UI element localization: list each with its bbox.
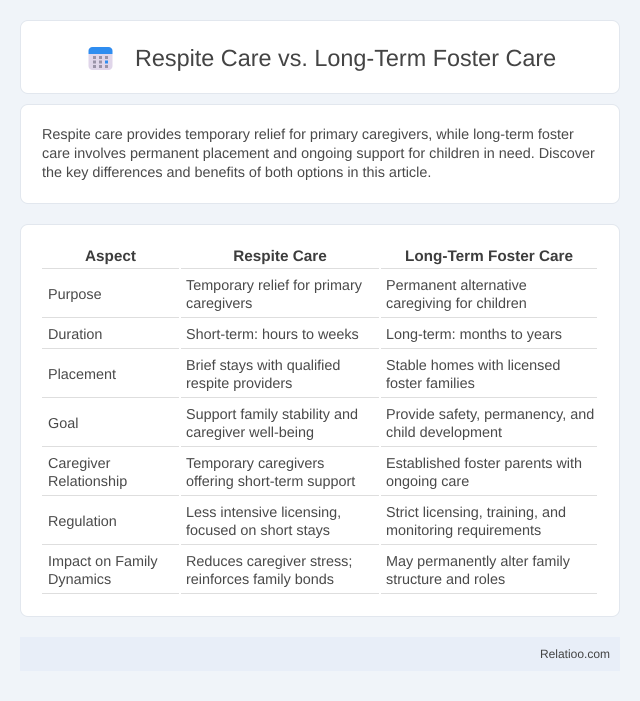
- Goal respite: [186, 407, 358, 441]
- intro text: the key differences and benefits of both options in this article.: [42, 165, 431, 181]
- Regulation respite: focused on short stays: [186, 523, 330, 539]
- Goal foster: child development: [386, 425, 502, 441]
- Purpose foster: caregiving for children: [386, 296, 527, 312]
- Placement foster: foster families: [386, 376, 475, 392]
- Relationship foster: Established foster parents with: [386, 456, 582, 472]
- row: Regulation: Regulation: [48, 514, 117, 530]
- Goal respite: caregiver well-being: [186, 425, 314, 441]
- intro text: Respite care provides temporary relief for primary caregivers, while long-term foster: [42, 127, 574, 143]
- row: Impact on Family Dynamics: Impact on Family: [48, 554, 158, 570]
- Goal foster: [386, 407, 594, 441]
- row: Goal: Goal: [48, 416, 78, 432]
- title card: [20, 20, 620, 94]
- Relationship respite: offering short-term support: [186, 474, 355, 490]
- row: Impact on Family Dynamics: [48, 554, 158, 588]
- row: Placement: Placement: [48, 367, 116, 383]
- Placement respite: respite providers: [186, 376, 292, 392]
- table card: [20, 224, 620, 617]
- Impact foster: May permanently alter family: [386, 554, 570, 570]
- Purpose foster: Permanent alternative: [386, 278, 527, 294]
- intro text: care involves permanent placement and ongoing support for children in need. Discover: [42, 146, 595, 162]
- row: Purpose: Purpose: [48, 287, 102, 303]
- Regulation foster: Strict licensing, training, and: [386, 505, 566, 521]
- title: Respite Care vs. Long-Term Foster Care: [135, 45, 556, 71]
- Goal foster: Provide safety, permanency, and: [386, 407, 594, 423]
- Purpose respite: Temporary relief for primary: [186, 278, 362, 294]
- row: Duration: Duration: [48, 327, 102, 343]
- Impact respite: [186, 554, 352, 588]
- Duration foster: Long-term: months to years: [386, 327, 562, 343]
- Relationship respite: [186, 456, 356, 490]
- Relationship respite: Temporary caregivers: [186, 456, 324, 472]
- Relationship foster: ongoing care: [386, 474, 469, 490]
- Placement foster: Stable homes with licensed: [386, 358, 560, 374]
- Impact foster: structure and roles: [386, 572, 505, 588]
- Purpose foster: [386, 278, 527, 312]
- Goal respite: Support family stability and: [186, 407, 358, 423]
- Regulation respite: [186, 505, 341, 539]
- Placement respite: Brief stays with qualified: [186, 358, 340, 374]
- row: Caregiver Relationship: [48, 456, 127, 490]
- row: Caregiver Relationship: Relationship: [48, 474, 127, 490]
- intro text: [42, 127, 595, 181]
- Relationship foster: [386, 456, 582, 490]
- Placement foster: [386, 358, 560, 392]
- Purpose respite: [186, 278, 362, 312]
- Purpose respite: caregivers: [186, 296, 252, 312]
- Impact respite: reinforces family bonds: [186, 572, 334, 588]
- Regulation foster: monitoring requirements: [386, 523, 541, 539]
- Impact respite: Reduces caregiver stress;: [186, 554, 352, 570]
- header: Respite Care: Respite Care: [233, 248, 327, 265]
- row: Caregiver Relationship: Caregiver: [48, 456, 110, 472]
- header: Aspect: Aspect: [85, 248, 136, 265]
- icon: calendar: [88, 47, 112, 70]
- Duration respite: Short-term: hours to weeks: [186, 327, 359, 343]
- row: Impact on Family Dynamics: Dynamics: [48, 572, 111, 588]
- Impact foster: [386, 554, 570, 588]
- Regulation foster: [386, 505, 566, 539]
- header: Long-Term Foster Care: Long-Term Foster Care: [405, 248, 573, 265]
- Regulation respite: Less intensive licensing,: [186, 505, 341, 521]
- footer brand: Relatioo.com: [540, 647, 610, 661]
- intro card: [20, 104, 620, 204]
- Placement respite: [186, 358, 340, 392]
- footer bar: [20, 637, 620, 671]
